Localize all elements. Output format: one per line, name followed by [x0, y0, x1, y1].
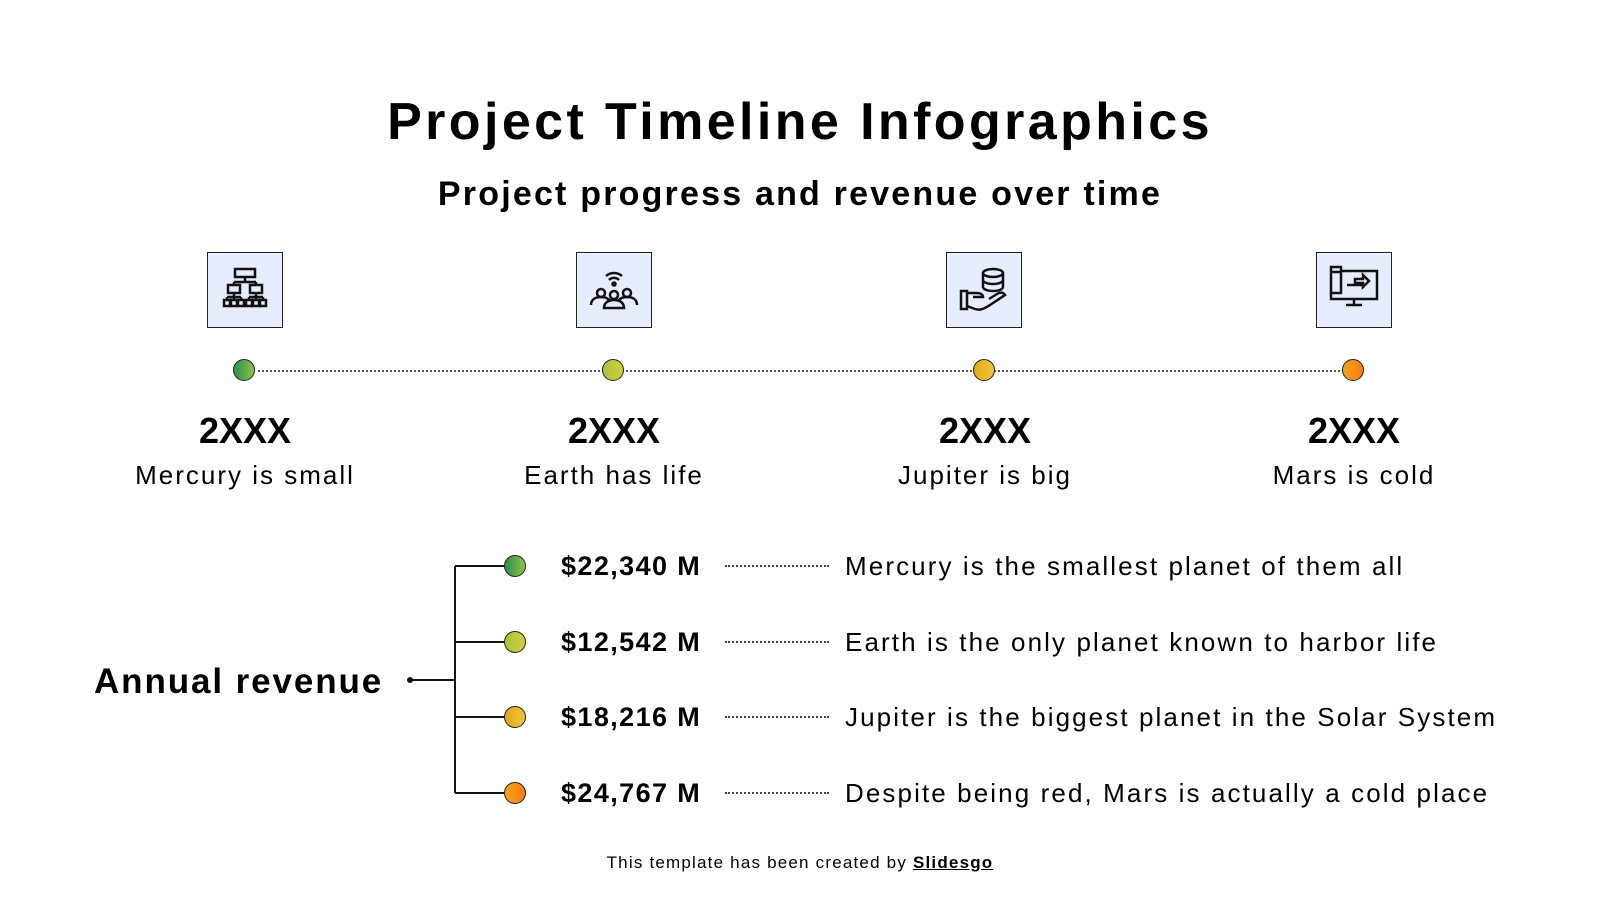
milestone 1: Mercury is small	[135, 460, 355, 490]
revenue dots	[504, 555, 526, 577]
milestone 3: Jupiter is big	[898, 460, 1072, 490]
subtitle: Project progress and revenue over time	[438, 175, 1162, 213]
text: $12,542 M	[561, 627, 701, 657]
milestone 1: 2XXX	[199, 410, 291, 451]
milestone 4: Mars is cold	[1273, 460, 1435, 490]
icon: hierarchy	[207, 252, 283, 328]
revenue rows: $22,340 M	[561, 551, 701, 581]
icon: monitor	[1316, 252, 1392, 328]
milestone 3: 2XXX	[939, 410, 1031, 451]
text: Earth is the only planet known to harbor life	[845, 627, 1438, 657]
annual revenue label: Annual revenue	[94, 662, 383, 701]
milestone 1	[135, 410, 355, 490]
title: Project Timeline Infographics	[387, 93, 1213, 151]
bracket	[407, 565, 504, 794]
text: Jupiter is the biggest planet in the Solar System	[845, 702, 1497, 732]
milestone 4: 2XXX	[1308, 410, 1400, 451]
text: $24,767 M	[561, 778, 701, 808]
milestone 4	[1273, 410, 1435, 490]
text: Mercury is the smallest planet of them all	[845, 551, 1404, 581]
icon: team	[576, 252, 652, 328]
milestone 2	[524, 410, 704, 490]
timeline line	[258, 370, 1348, 372]
icon: money hand	[946, 252, 1022, 328]
text: $18,216 M	[561, 702, 701, 732]
dots timeline	[233, 359, 255, 381]
milestone 2: 2XXX	[568, 410, 660, 451]
milestone 3	[898, 410, 1072, 490]
footer: This template has been created by Slidesgo	[607, 853, 993, 872]
milestone 2: Earth has life	[524, 460, 704, 490]
text: Despite being red, Mars is actually a cold place	[845, 778, 1489, 808]
